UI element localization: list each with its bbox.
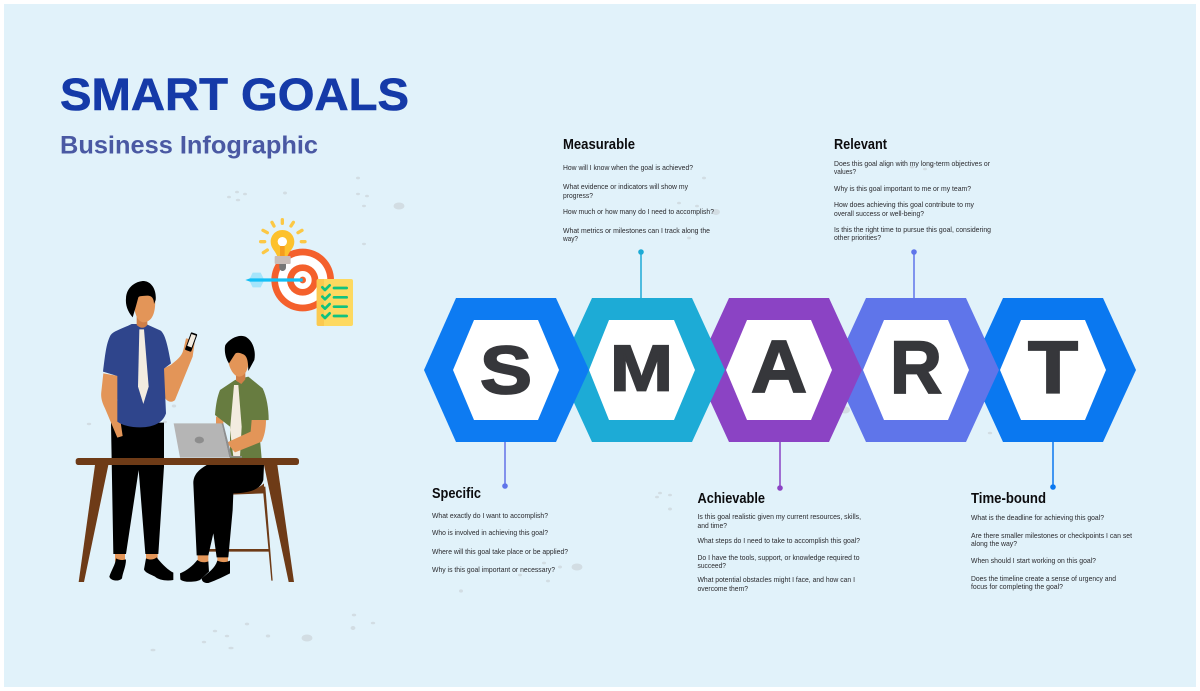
text block: Specific (432, 486, 568, 574)
text block: Measurable: How will I know when the goal is achieved? (563, 163, 693, 172)
text block: Relevant: Relevant (834, 137, 887, 153)
text block: Measurable: What metrics or milestones can I track along the (563, 226, 710, 235)
hexagon T (970, 298, 1136, 442)
text block: Time-bound: focus for completing the goal? (971, 582, 1063, 591)
hexagon R: R (890, 326, 942, 409)
text block: Time-bound: Are there smaller milestones or checkpoints I can set (971, 531, 1133, 540)
text block: Time-bound: Does the timeline create a sense of urgency and (971, 574, 1116, 583)
text block: Measurable (562, 137, 714, 243)
text block: Specific: What exactly do I want to accomplish? (432, 511, 548, 520)
text block: Time-bound: Time-bound (971, 491, 1046, 507)
text block: Achievable: Achievable (698, 491, 765, 507)
standing man (101, 281, 197, 581)
hexagon M: M (610, 332, 673, 404)
checklist (317, 279, 353, 326)
text block: Measurable: progress? (563, 191, 593, 200)
text block: Relevant (834, 137, 991, 242)
hexagon A (696, 298, 862, 442)
icon: target, light bulb, arrow and checklist (245, 220, 353, 326)
text block: Specific: Who is involved in achieving this goal? (432, 528, 548, 537)
text block: Time-bound: What is the deadline for achieving this goal? (971, 513, 1104, 522)
text block: Relevant: other priorities? (834, 233, 881, 242)
text block: Relevant: Is this the right time to pursue this goal, considering (834, 225, 991, 234)
hexagon M (559, 298, 725, 442)
text block: Achievable: Is this goal realistic given my current resources, skills, (698, 512, 861, 521)
connector: A to Achievable (777, 442, 783, 491)
target (271, 249, 334, 311)
text block: Achievable: and time? (698, 521, 727, 530)
text block: Relevant: values? (834, 167, 856, 176)
text block: Measurable: What evidence or indicators will show my (563, 182, 688, 191)
text block: Achievable: What steps do I need to take to accomplish this goal? (698, 536, 860, 545)
text block: Achievable: overcome them? (698, 584, 748, 593)
text block: Measurable: Measurable (563, 137, 635, 153)
text block: Relevant: How does achieving this goal contribute to my (834, 200, 974, 209)
text block: Measurable: way? (562, 234, 578, 243)
text block: Specific: Specific (432, 486, 481, 502)
seated man (193, 336, 269, 564)
hexagon A: A (751, 325, 807, 408)
text block: Relevant: Why is this goal important to me or my team? (834, 184, 971, 193)
connector: R to Relevant (911, 249, 917, 298)
hexagon R (833, 298, 999, 442)
laptop (174, 423, 242, 458)
text block: Achievable: Do I have the tools, support, or knowledge required to (698, 553, 860, 562)
text block: Relevant: overall success or well-being? (834, 209, 924, 218)
text block: Achievable: What potential obstacles might I face, and how can I (698, 575, 855, 584)
subtitle: Business Infographic (60, 132, 318, 160)
shoes of seated man (180, 560, 230, 583)
illustration: two business people at a desk (76, 281, 299, 583)
chair (207, 483, 273, 581)
title: SMART GOALS (60, 69, 409, 120)
hexagon T: T (1028, 326, 1078, 409)
text block: Specific: Where will this goal take place or be applied? (432, 547, 568, 556)
desk (76, 458, 299, 582)
connector: M to Measurable (638, 249, 644, 298)
text block: Measurable: How much or how many do I need to accomplish? (563, 207, 714, 216)
hexagon S (424, 298, 589, 442)
hexagon chain: SMART (424, 298, 1136, 442)
text block: Achievable (698, 491, 861, 593)
arrow (245, 273, 303, 287)
text block: Specific: Why is this goal important or necessary? (432, 565, 555, 574)
light bulb (261, 220, 305, 271)
text block: Time-bound: When should I start working on this goal? (971, 556, 1096, 565)
connector: S to Specific (502, 442, 508, 489)
text block: Time-bound: along the way? (971, 539, 1017, 548)
connector: T to Time-bound (1050, 442, 1056, 490)
text block: Time-bound (971, 491, 1133, 591)
text block: Achievable: succeed? (698, 561, 726, 570)
text block: Relevant: Does this goal align with my long-term objectives or (834, 159, 990, 168)
hexagon S: S (480, 332, 532, 408)
